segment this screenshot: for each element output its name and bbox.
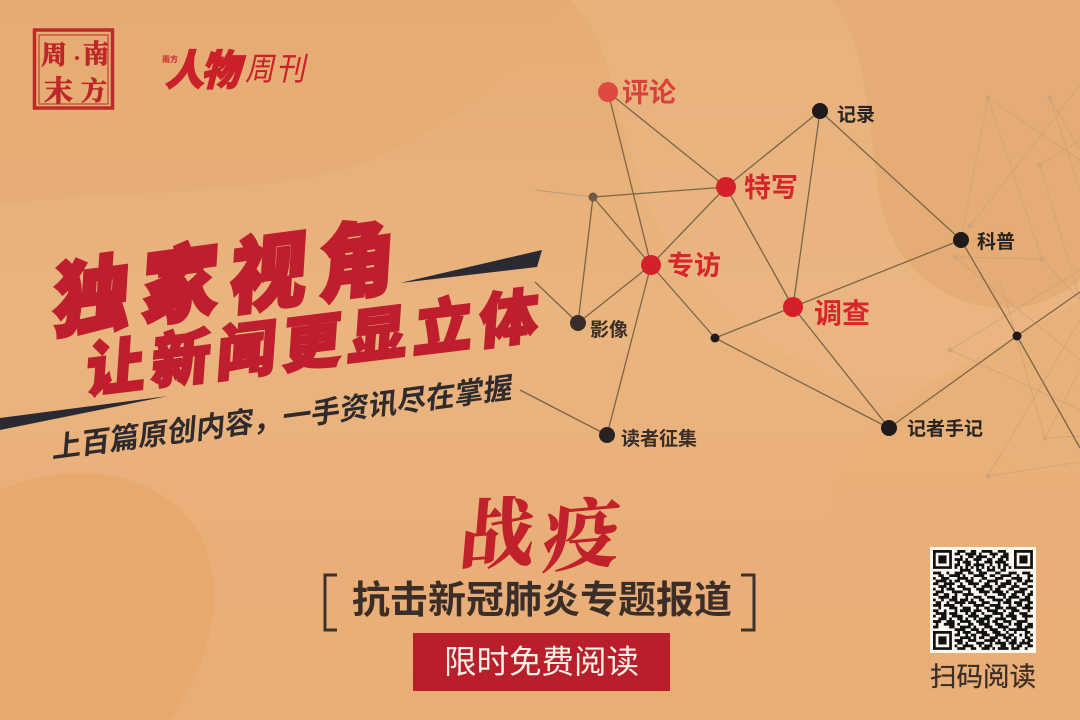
node: 影像: 影像 bbox=[590, 319, 628, 341]
logo: 人物周刊 bbox=[162, 47, 313, 94]
left bracket bbox=[325, 575, 337, 630]
node: 科普 bbox=[953, 231, 1015, 253]
node: small black bbox=[710, 334, 720, 342]
subtitle: 上百篇原创内容，一手资讯尽在掌握 bbox=[51, 371, 514, 465]
node: 影像 bbox=[570, 315, 628, 341]
faint background network bbox=[948, 85, 1080, 478]
decorative wedge: lower bbox=[0, 396, 168, 430]
seal logo: 南方周末: 周 bbox=[41, 41, 67, 70]
node: 读者征集: 读者征集 bbox=[621, 428, 697, 450]
headline line 1: 独家视角 bbox=[51, 209, 410, 349]
logo: 人物周刊: 南方 bbox=[162, 54, 178, 64]
node: 科普: 科普 bbox=[977, 231, 1015, 253]
calligraphy title: 战疫 bbox=[456, 490, 623, 583]
node: 特写 bbox=[716, 173, 798, 203]
right bracket bbox=[741, 575, 754, 630]
node: 记录: 记录 bbox=[837, 104, 875, 126]
button: 限时免费阅读 bbox=[444, 644, 639, 680]
node: 记者手记: 记者手记 bbox=[907, 418, 983, 440]
calligraphy title: 战疫: 战 bbox=[456, 490, 539, 582]
seal logo: 南方周末: 末 bbox=[44, 75, 73, 108]
node: 专访 bbox=[641, 251, 721, 281]
logo: 人物周刊: 周刊 bbox=[243, 51, 313, 87]
subject heading: 抗击新冠肺炎专题报道 bbox=[352, 580, 732, 622]
node: 记录 bbox=[812, 103, 875, 126]
decorative wedge: upper bbox=[400, 250, 542, 283]
node: 特写: 特写 bbox=[744, 173, 798, 203]
QR caption: 扫码阅读 bbox=[930, 662, 1036, 692]
node: 评论: 评论 bbox=[622, 78, 676, 108]
node: 专访: 专访 bbox=[667, 251, 721, 281]
seal logo: 南方周末: 方 bbox=[81, 77, 107, 106]
node: small grey bbox=[588, 192, 598, 202]
logo: 人物周刊: 人物 bbox=[163, 47, 248, 94]
seal logo: 南方周末 bbox=[34, 30, 112, 108]
node: 调查 bbox=[783, 297, 870, 329]
QR code bbox=[930, 547, 1036, 653]
node: 调查: 调查 bbox=[814, 298, 870, 329]
network connecting lines bbox=[520, 92, 1080, 448]
button bbox=[413, 633, 670, 691]
headline line 2: 让新闻更显立体 bbox=[84, 281, 547, 405]
node: small black right bbox=[1012, 332, 1022, 340]
node: 评论 bbox=[598, 78, 676, 108]
calligraphy title: 战疫: 疫 bbox=[540, 491, 623, 583]
seal logo: 南方周末: 南 bbox=[83, 40, 109, 69]
